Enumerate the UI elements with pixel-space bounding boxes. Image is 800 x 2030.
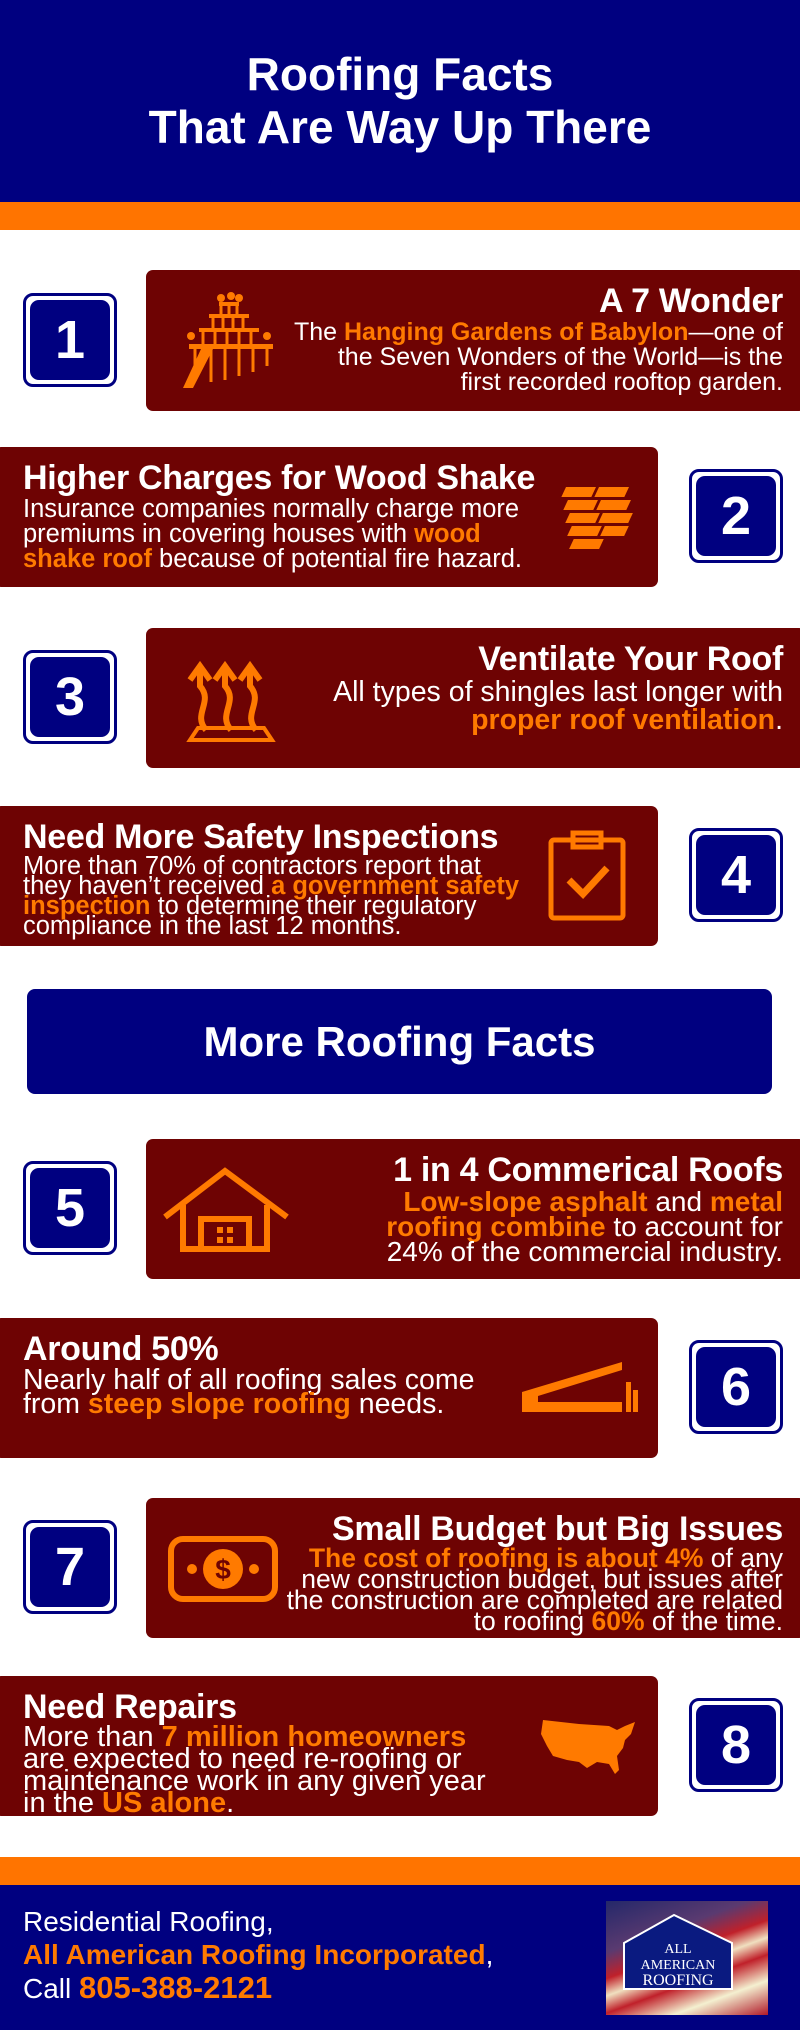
banner: More Roofing Facts [27, 989, 772, 1094]
text: compliance in the last 12 months. [23, 912, 401, 940]
title: Around 50% [23, 1330, 218, 1368]
number 5 [23, 1161, 117, 1255]
icon: hanging gardens [183, 292, 273, 388]
title: Need More Safety Inspections [23, 818, 498, 856]
card 3 [146, 628, 800, 768]
icon: ventilation [186, 661, 276, 742]
number 8: 8 [721, 1715, 751, 1775]
text: are expected to need re-roofing or [23, 1743, 462, 1775]
number 6 [689, 1340, 783, 1434]
text: premiums in covering houses with wood [23, 520, 481, 548]
title: A 7 Wonder: A 7 Wonder [599, 282, 783, 320]
text: proper roof ventilation. [471, 704, 783, 736]
number 2 [689, 469, 783, 563]
icon: money: $ [215, 1554, 231, 1585]
number 8 [689, 1698, 783, 1792]
text: the construction are completed are related [287, 1585, 783, 1615]
text: shake roof because of potential fire hazard. [23, 545, 522, 573]
card 2 [0, 447, 658, 587]
title: Higher Charges for Wood Shake [23, 459, 535, 497]
text: maintenance work in any given year [23, 1765, 486, 1797]
logo: ALL [664, 1942, 692, 1957]
icon: clipboard [548, 830, 626, 920]
text: to roofing 60% of the time. [474, 1606, 783, 1636]
text: Insurance companies normally charge more [23, 495, 519, 523]
text: inspection to determine their regulatory [23, 892, 477, 920]
number 6: 6 [721, 1357, 751, 1417]
title: Small Budget but Big Issues [332, 1510, 783, 1548]
title: Ventilate Your Roof [478, 640, 783, 678]
number 3: 3 [55, 667, 85, 727]
number 7 [23, 1520, 117, 1614]
number 1: 1 [55, 310, 85, 370]
text [287, 1543, 783, 1636]
text: new construction budget, but issues after [301, 1564, 783, 1594]
text: 24% of the commercial industry. [387, 1236, 783, 1267]
banner: More Roofing Facts: More Roofing Facts [203, 1018, 596, 1065]
footer text [23, 1906, 493, 2005]
text: Low-slope asphalt and metal [403, 1186, 783, 1217]
icon: house [163, 1167, 289, 1252]
card 1 [146, 270, 800, 411]
title: Need Repairs [23, 1688, 237, 1726]
icon: US map [541, 1720, 635, 1774]
text: the Seven Wonders of the World—is the [338, 343, 783, 371]
text: from steep slope roofing needs. [23, 1388, 444, 1420]
card 7 [146, 1498, 800, 1638]
text: Nearly half of all roofing sales come [23, 1364, 474, 1396]
text [23, 1364, 474, 1420]
number 2: 2 [721, 486, 751, 546]
icon: wood shake [561, 487, 633, 549]
logo: ROOFING [642, 1972, 714, 1989]
icon: money [168, 1536, 278, 1602]
footer text: Call 805-388-2121 [23, 1970, 272, 2005]
text [23, 1721, 486, 1819]
header [0, 0, 800, 202]
number 3 [23, 650, 117, 744]
text [23, 852, 519, 940]
title: Roofing Facts [247, 48, 553, 100]
number 7: 7 [55, 1537, 85, 1597]
card 6 [0, 1318, 658, 1458]
footer text: All American Roofing Incorporated, [23, 1939, 493, 1970]
text: they haven’t received a government safety [23, 872, 519, 900]
number 1 [23, 293, 117, 387]
text [294, 318, 783, 396]
title: That Are Way Up There [149, 101, 651, 153]
number 5: 5 [55, 1178, 85, 1238]
text: roofing combine to account for [386, 1211, 783, 1242]
text [333, 676, 783, 736]
text: in the US alone. [23, 1787, 234, 1819]
card 4 [0, 806, 658, 946]
number 4 [689, 828, 783, 922]
footer text: Residential Roofing, [23, 1906, 274, 1937]
text [23, 495, 522, 573]
title [149, 48, 651, 153]
text: All types of shingles last longer with [333, 676, 783, 708]
icon: steep slope [522, 1362, 638, 1412]
text: The Hanging Gardens of Babylon—one of [294, 318, 783, 346]
title: 1 in 4 Commerical Roofs [393, 1151, 783, 1189]
logo: AMERICAN [641, 1958, 715, 1973]
text: More than 70% of contractors report that [23, 852, 481, 880]
card 5 [146, 1139, 800, 1279]
card 8 [0, 1676, 658, 1816]
text: More than 7 million homeowners [23, 1721, 466, 1753]
logo [606, 1901, 768, 2015]
footer [0, 1857, 800, 2030]
number 4: 4 [721, 845, 751, 905]
text [386, 1186, 783, 1267]
text: The cost of roofing is about 4% of any [309, 1543, 783, 1573]
text: first recorded rooftop garden. [461, 368, 783, 396]
